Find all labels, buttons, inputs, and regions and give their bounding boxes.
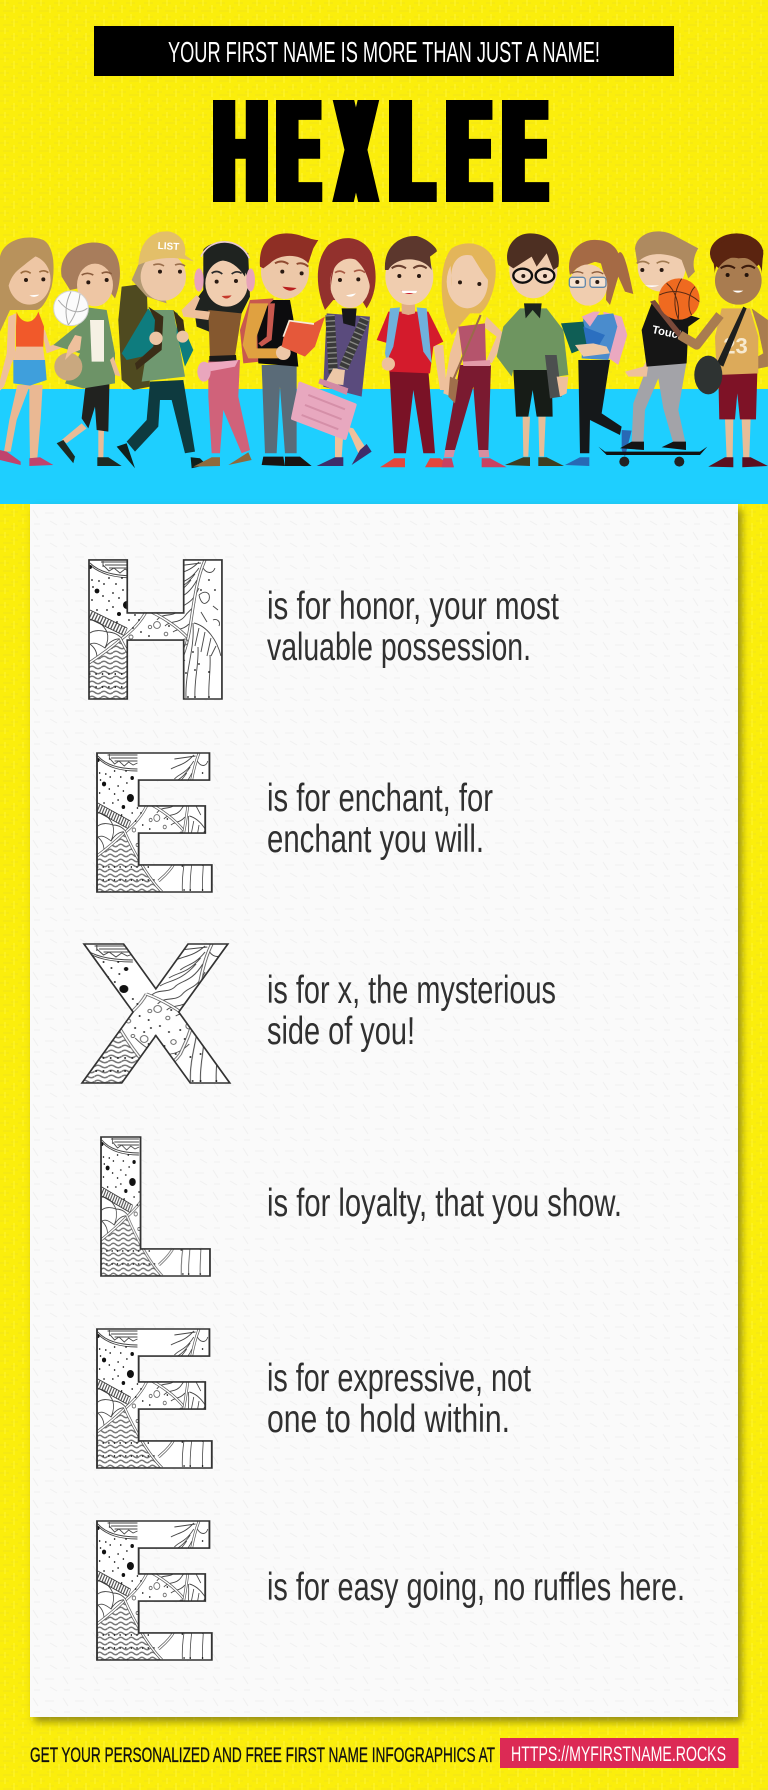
letter E: E (77, 1483, 228, 1705)
letter H: H (70, 522, 241, 744)
text block (267, 585, 559, 669)
top banner (94, 26, 674, 76)
row: L is for loyalty (82, 1100, 622, 1322)
text block: side of you! (267, 1010, 415, 1053)
title: name: E (274, 74, 323, 236)
main white card (30, 504, 738, 1717)
title: name: E (500, 73, 550, 236)
person: boy on skateboard: Touch (651, 324, 686, 343)
text block: is for x, the mysterious (267, 969, 556, 1012)
person: girl with pink case (293, 238, 376, 466)
person: boy with glasses and folder (497, 233, 568, 466)
title: name: E (444, 73, 494, 236)
text block: one to hold within. (267, 1398, 510, 1441)
person: girl with volleyball (53, 243, 122, 466)
person: boy on skateboard (598, 231, 707, 467)
text block: is for expressive, not (267, 1357, 531, 1400)
title: name (211, 72, 550, 236)
person: blonde girl with shoulder bag (442, 243, 507, 467)
letter L: L (82, 1100, 216, 1322)
person: girl with headphones (182, 242, 255, 467)
letter X: X (78, 907, 234, 1129)
row: E is for enchant (77, 715, 493, 937)
person: boy in tank top with bag (680, 233, 768, 467)
text block: enchant you will. (267, 818, 484, 861)
footer call to action: GET YOUR PERSONALIZED AND FREE FIRST NAME INFOGRAPHICS AT (30, 1743, 495, 1767)
text block (267, 777, 493, 861)
row: H is for honor (70, 522, 559, 744)
text block: is for honor, your most (267, 585, 559, 628)
text block (267, 1357, 531, 1441)
person: boy with hiking backpack and cap: LIST (157, 241, 180, 253)
person: boy with red book (240, 233, 325, 466)
title: name: L (387, 74, 434, 236)
person: girl in orange top (0, 237, 81, 466)
person: girl with ponytail and tablet (561, 240, 633, 466)
person: boy with hiking backpack and cap (117, 231, 207, 468)
icon: basketball (658, 278, 700, 320)
person: boy in tank top with bag: 23 (723, 333, 748, 358)
letter E: E (77, 715, 228, 937)
row: E is for expressive (77, 1291, 531, 1513)
title: name: X (337, 72, 375, 235)
text block: is for loyalty, that you show. (267, 1182, 622, 1225)
text block: valuable possession. (267, 626, 531, 669)
illustration: group of young people (0, 231, 768, 468)
footer link badge (500, 1738, 738, 1768)
row: E is for easy going (77, 1483, 685, 1705)
text block: is for enchant, for (267, 777, 493, 820)
title: name: H (211, 73, 270, 236)
row: X is for x (78, 907, 556, 1129)
letter E: E (77, 1291, 228, 1513)
text block (267, 969, 556, 1053)
person: boy in red shirt (377, 236, 453, 467)
blue floor band (0, 389, 768, 504)
